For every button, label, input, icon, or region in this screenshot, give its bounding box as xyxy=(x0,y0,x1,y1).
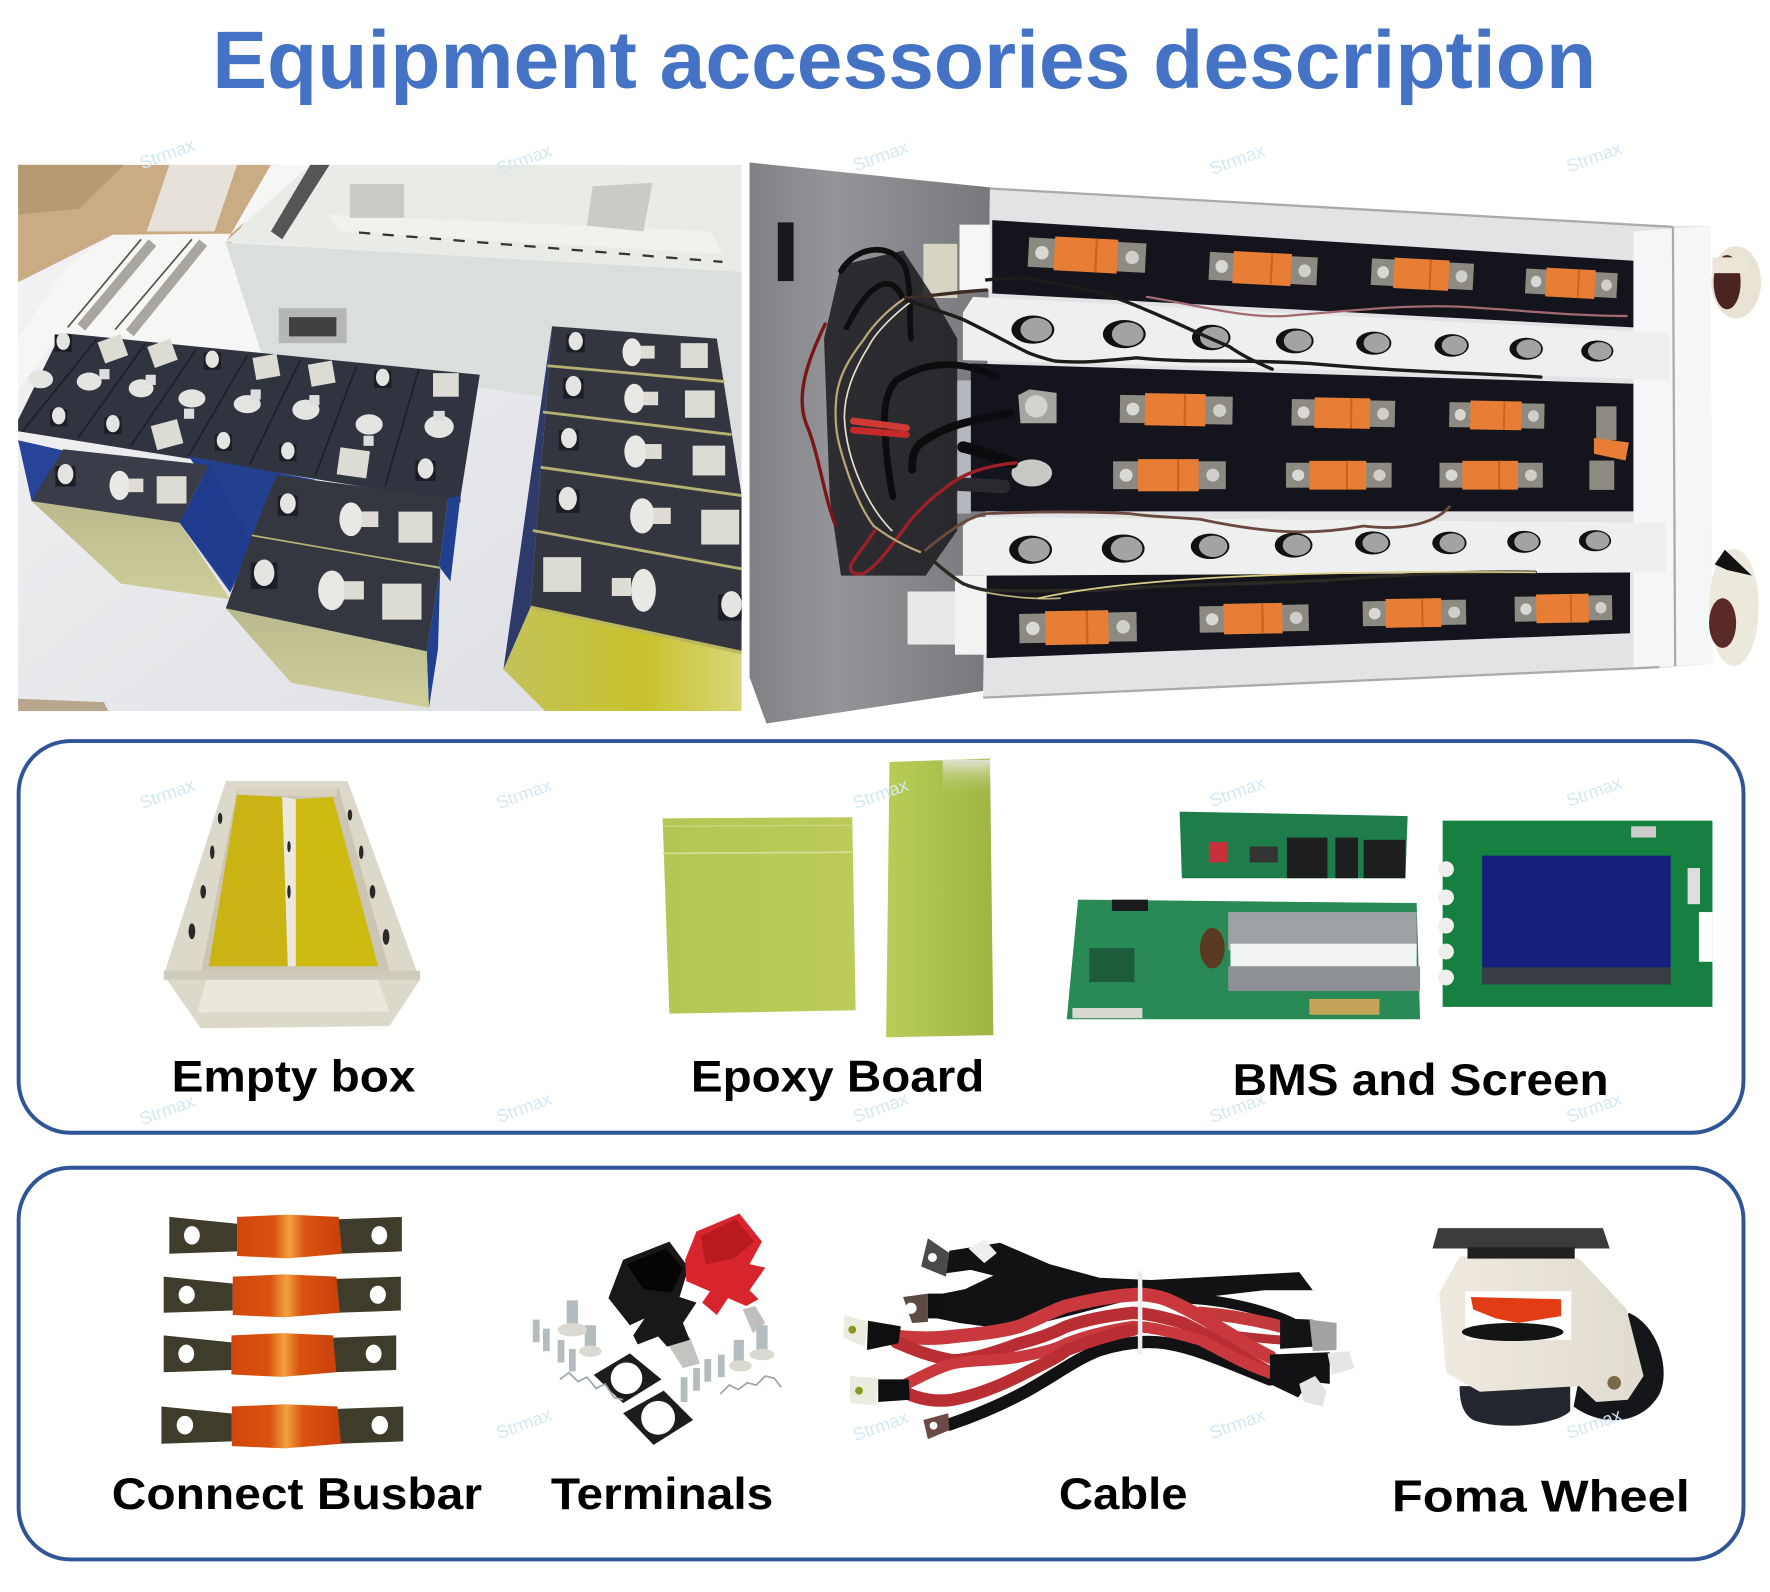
icon: foma wheel xyxy=(1432,1228,1664,1426)
row of eight cells xyxy=(18,333,480,593)
front cells B and C xyxy=(226,475,461,708)
watermarks: Strmax xyxy=(137,1091,197,1129)
photo: assembled battery pack xyxy=(750,163,1761,724)
watermarks: Strmax xyxy=(137,135,197,173)
panel: busbar, terminals, cable, wheel xyxy=(19,1168,1743,1559)
panel: box, epoxy, BMS xyxy=(19,741,1743,1133)
label: foma wheel: Foma Wheel xyxy=(1392,1472,1690,1521)
cardboard backdrop xyxy=(18,165,280,282)
white tray with rails xyxy=(112,165,280,352)
wiring harness xyxy=(802,250,1627,599)
lower white bar xyxy=(963,517,1666,576)
label: cable: Cable xyxy=(1059,1470,1188,1519)
dark cell rows xyxy=(971,220,1633,658)
watermarks: Strmax xyxy=(493,775,554,813)
watermarks: Strmax xyxy=(1564,773,1624,811)
handle xyxy=(279,308,347,343)
label: BMS and screen: BMS and Screen xyxy=(1233,1056,1609,1105)
icon: epoxy boards xyxy=(663,759,993,1037)
white inner frame xyxy=(983,187,1712,699)
watermarks: Strmax xyxy=(1564,1089,1624,1127)
icon: connect busbars xyxy=(161,1215,403,1448)
wheels xyxy=(1709,246,1761,666)
watermarks: Strmax xyxy=(850,137,911,175)
photo: cells and empty enclosure xyxy=(18,165,745,711)
watermarks: Strmax xyxy=(493,1405,554,1443)
busbars xyxy=(1011,235,1629,646)
watermarks: Strmax xyxy=(1207,140,1267,179)
icon: terminals xyxy=(533,1213,781,1445)
enclosure interior xyxy=(226,165,546,254)
label: connect busbar: Connect Busbar xyxy=(112,1470,482,1519)
watermarks: Strmax xyxy=(493,1089,554,1127)
watermarks: Strmax xyxy=(850,1089,911,1127)
icon: BMS boards and screen xyxy=(1067,812,1712,1019)
watermarks: Strmax xyxy=(137,775,197,813)
side brackets and centre post xyxy=(908,225,990,655)
upper white bar xyxy=(963,297,1670,380)
title: Equipment accessories description xyxy=(212,15,1596,106)
watermarks: Strmax xyxy=(1207,773,1267,811)
watermarks: Strmax xyxy=(1564,138,1624,176)
rear gray panel xyxy=(750,163,990,724)
watermarks: Strmax xyxy=(850,1407,911,1445)
enclosure front face xyxy=(226,243,742,474)
watermarks: Strmax xyxy=(1564,1405,1624,1443)
watermarks: Strmax xyxy=(1207,1089,1267,1127)
watermarks: Strmax xyxy=(850,775,911,813)
watermarks: Strmax xyxy=(493,140,554,179)
icon: empty box xyxy=(164,781,420,1028)
right stack of cells xyxy=(503,326,745,711)
watermarks: Strmax xyxy=(1207,1405,1267,1443)
front cell A xyxy=(32,449,252,599)
label: terminals: Terminals xyxy=(551,1470,773,1519)
icon: cable bundle xyxy=(843,1238,1355,1439)
label: empty box: Empty box xyxy=(172,1053,416,1102)
label: epoxy board: Epoxy Board xyxy=(691,1053,984,1102)
watermarks xyxy=(137,135,1624,1445)
